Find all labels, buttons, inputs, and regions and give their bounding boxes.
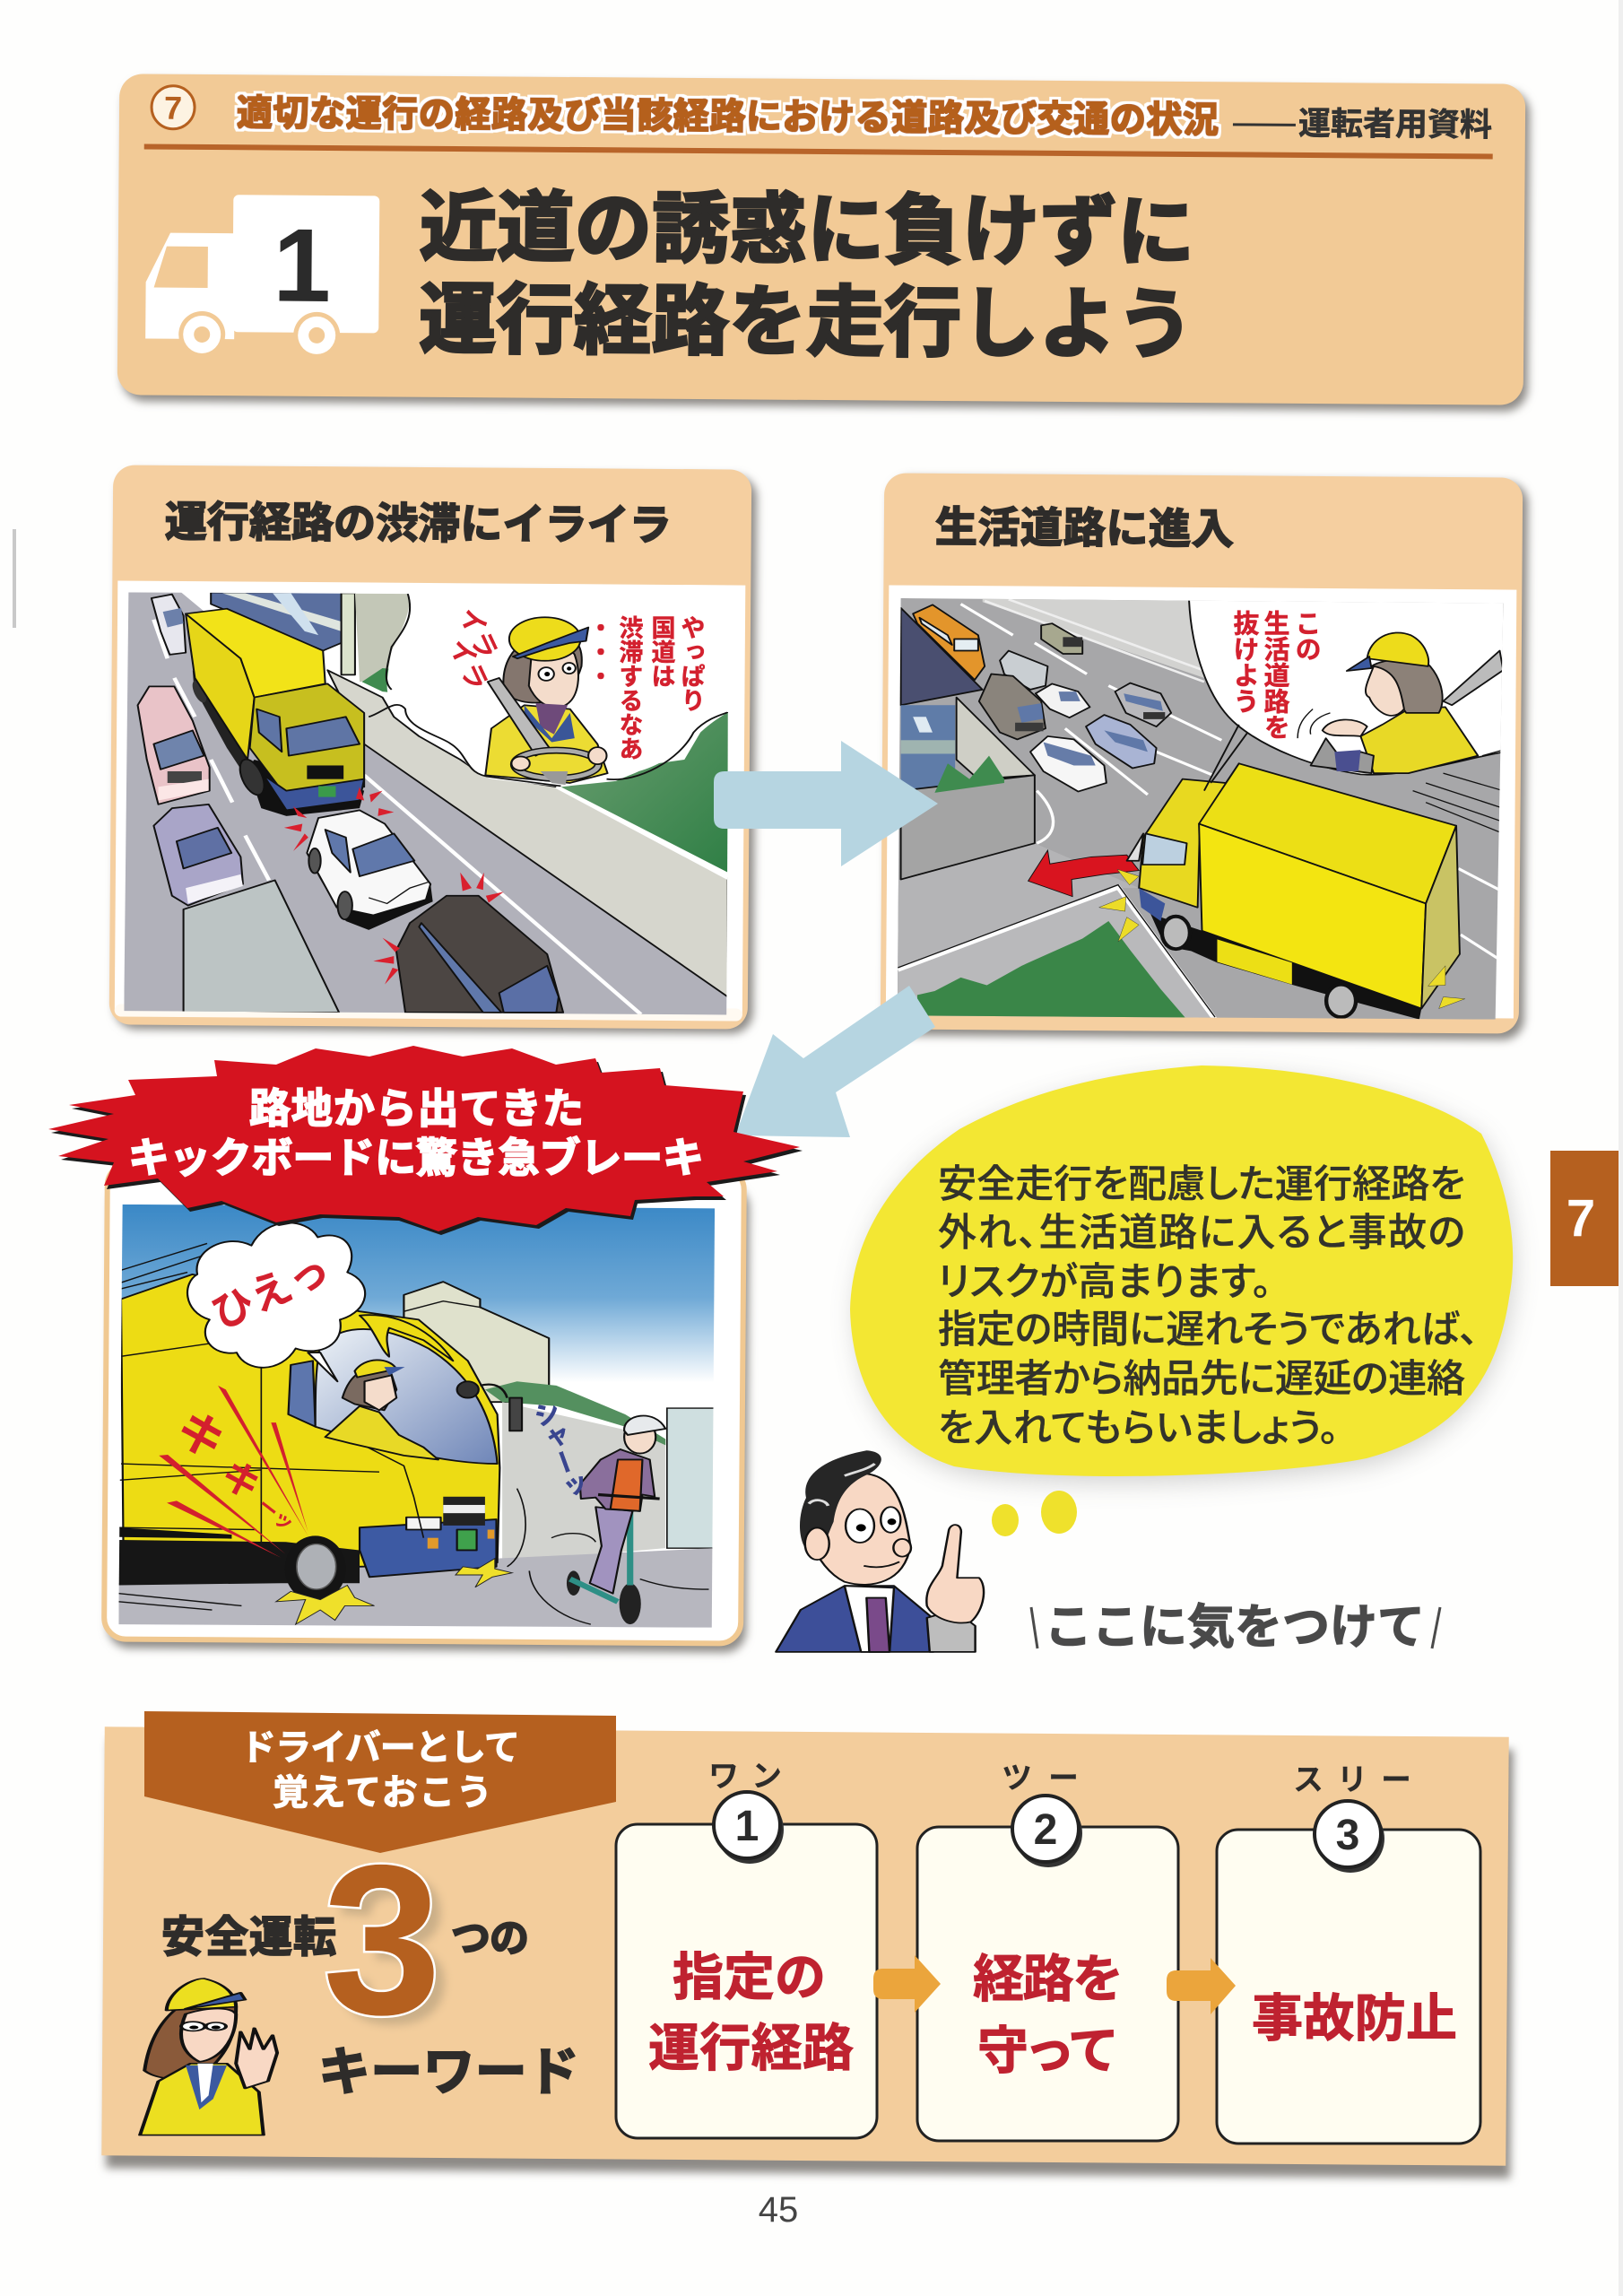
panel heading: 生活道路に進入: [935, 492, 1234, 556]
advice text: 管理者から納品先に遅延の連絡: [938, 1348, 1465, 1404]
lane markings: [153, 620, 641, 1014]
callout: yellow advice bubble: [850, 1065, 1514, 1483]
speech: national road is jammed: 国道は: [646, 615, 681, 688]
banner: remember as a driver: 覚えておこう: [273, 1763, 492, 1815]
motion lines: [118, 1243, 708, 1624]
building: [901, 608, 1035, 880]
number badge 2: 2: [1034, 1806, 1057, 1854]
big number 3 heading: キーワード: [318, 2030, 579, 2105]
gray truck box: [184, 880, 339, 1013]
speech: national road is jammed: ・・・: [583, 615, 619, 688]
icon: white truck with number 1: [145, 194, 379, 359]
sound effect: irritated: [441, 599, 509, 696]
thought dots: [992, 1491, 1077, 1536]
corner wall and bush: [898, 885, 1215, 1020]
keyword 1: 指定の: [673, 1936, 826, 2010]
big number 3 heading: 3: [334, 1831, 452, 2068]
gray van: [979, 674, 1046, 739]
tab: chapter 7: [1550, 1151, 1619, 1286]
right building: [667, 1408, 716, 1548]
yellow truck: [186, 609, 364, 816]
red burst banner: [48, 1046, 803, 1235]
keyword 1: 運行経路: [648, 2007, 854, 2081]
red skid lines: [159, 1386, 308, 1558]
advice text: [938, 1153, 1479, 1453]
skid sound effect: キ: [211, 1445, 274, 1511]
lower-left ground: [898, 843, 1139, 970]
red turn arrow: [1028, 850, 1139, 897]
kick scooter rider: [551, 1415, 665, 1624]
pink van: [138, 686, 210, 804]
panel: entering residential road: [881, 473, 1528, 1040]
banner text: キックボードに驚き急ブレーキ: [128, 1126, 704, 1185]
page number: 45: [759, 2190, 798, 2230]
blue car: [1086, 715, 1157, 769]
hedge: [561, 712, 728, 873]
distant vehicles: [1000, 623, 1082, 690]
big number 3 heading: 安全運転: [161, 1901, 336, 1964]
truck: [118, 1274, 522, 1602]
big number 3 heading: つの: [451, 1906, 529, 1963]
number badge 1: 1: [735, 1803, 759, 1850]
number badge 3: [1315, 1801, 1384, 1873]
thought bubble fill and driver: [369, 593, 728, 787]
white car near: [1030, 736, 1107, 792]
speech: let's cut through this road: 抜けよう: [1228, 610, 1265, 714]
arrow: panel 1 to panel 2: [714, 741, 938, 866]
header panel: [117, 74, 1530, 412]
furigana: ワン: [708, 1752, 782, 1796]
advice text: リスクが高まります。: [938, 1251, 1271, 1307]
panel: traffic jam: [109, 465, 757, 1034]
scooter sound effect: シャーッ: [525, 1395, 595, 1505]
advice text: 安全走行を配慮した運行経路を: [938, 1153, 1465, 1209]
red alarm spikes: [284, 787, 504, 985]
arrow: panel 2 to panel 3: [735, 986, 935, 1137]
silver van: [1115, 683, 1171, 726]
building: [211, 592, 413, 682]
keyword 3: 事故防止: [1252, 1978, 1457, 2051]
bubble tail: [1204, 725, 1247, 791]
number badge 1: [714, 1792, 784, 1864]
skid sound effect: ーッ: [252, 1490, 301, 1536]
cloud speech bubble: [187, 1222, 365, 1368]
advice text: を入れてもらいましょう。: [938, 1397, 1339, 1453]
panel: sudden brake: [104, 1163, 750, 1653]
banner text: 路地から出てきた: [249, 1076, 584, 1135]
advice text: 外れ、生活道路に入ると事故の: [938, 1202, 1465, 1257]
caption: watch out here: ここに気をつけて: [1045, 1589, 1425, 1657]
section subtitle: 適切な運行の経路及び当該経路における道路及び交通の状況: [237, 83, 1219, 143]
banner: remember as a driver: ドライバーとして: [240, 1718, 520, 1770]
panel heading: 運行経路の渋滞にイライラ: [165, 487, 672, 552]
orange arrows between cards: [873, 1955, 1236, 2014]
furigana: [708, 1752, 1411, 1799]
big number 3 heading: 3: [323, 1822, 441, 2059]
skid sound effect: キ: [164, 1391, 242, 1474]
number badge 2: [1012, 1796, 1082, 1867]
keyword 2: 守って: [977, 2010, 1119, 2083]
curb: [1037, 791, 1054, 843]
black van: [396, 896, 563, 1013]
icon: circled number 7: [152, 86, 195, 129]
sidewalk: [327, 670, 728, 997]
background building: [404, 1282, 549, 1402]
speech: national road is jammed: 渋滞するなあ: [613, 615, 649, 761]
keyword 2: [973, 1938, 1124, 2083]
white car: [307, 810, 433, 930]
icon: waving woman driver: [140, 1979, 277, 2135]
speech: let's cut through this road: 生活道路を: [1258, 610, 1296, 740]
bubble with driver: [1189, 598, 1504, 775]
tab: chapter 7: 7: [1567, 1189, 1595, 1248]
big number 3 heading: [161, 1822, 579, 2105]
icon: white truck with number 1: 1: [273, 207, 332, 324]
banner: remember as a driver: [144, 1711, 616, 1853]
card 3: [1217, 1801, 1480, 2144]
panel: three keywords: [101, 1711, 1514, 2179]
main title: 近道の誘惑に負けずに: [420, 164, 1195, 282]
cloud exclamation: ひえっ: [201, 1237, 338, 1341]
yellow truck: [1127, 763, 1460, 1020]
sound effect: irritated: イラ: [441, 631, 499, 696]
yellow impact bursts: [276, 1559, 512, 1624]
yellow impact spikes: [1099, 869, 1465, 1009]
illustration: truck braking for kick scooter: [118, 1205, 716, 1629]
main title: [419, 164, 1195, 374]
keyword 1: [648, 1936, 854, 2081]
road: [896, 598, 1504, 1022]
banner text: [128, 1076, 704, 1185]
speech: national road is jammed: やっぱり: [676, 615, 710, 712]
speech: let's cut through this road: [1228, 610, 1327, 740]
speech: let's cut through this road: この: [1289, 610, 1327, 662]
greenery: [485, 1381, 665, 1445]
icon: advisor man pointing: [776, 1450, 984, 1652]
furigana: スリー: [1293, 1755, 1411, 1799]
icon: circled number 7: 7: [164, 90, 182, 126]
illustration: jammed road and irritated driver: [124, 592, 728, 1016]
sound effect: irritated: イラ: [451, 599, 509, 665]
card 2: [917, 1796, 1178, 2141]
illustration: truck turning into side road: [896, 598, 1504, 1022]
road: [118, 1548, 714, 1629]
bush: [362, 668, 389, 692]
advice text: 指定の時間に遅れそうであれば、: [938, 1299, 1479, 1354]
lane dashes: [960, 604, 1503, 961]
audience label: 運転者用資料: [1298, 98, 1492, 145]
number badge 3: 3: [1336, 1812, 1359, 1859]
purple car: [153, 804, 243, 906]
road: [124, 592, 728, 1016]
bubble lower lines: [1413, 750, 1503, 833]
distant cars: [152, 595, 186, 655]
white car: [1036, 683, 1089, 718]
sky: [118, 1205, 716, 1629]
keyword 2: 経路を: [973, 1938, 1124, 2012]
card 1: [616, 1792, 877, 2138]
bus: [913, 604, 985, 680]
skid sound effect: [164, 1391, 301, 1536]
furigana: ツー: [1002, 1753, 1079, 1797]
wall: [502, 1402, 665, 1562]
speech: national road is jammed: [583, 615, 710, 761]
main title: 運行経路を走行しよう: [419, 257, 1194, 374]
